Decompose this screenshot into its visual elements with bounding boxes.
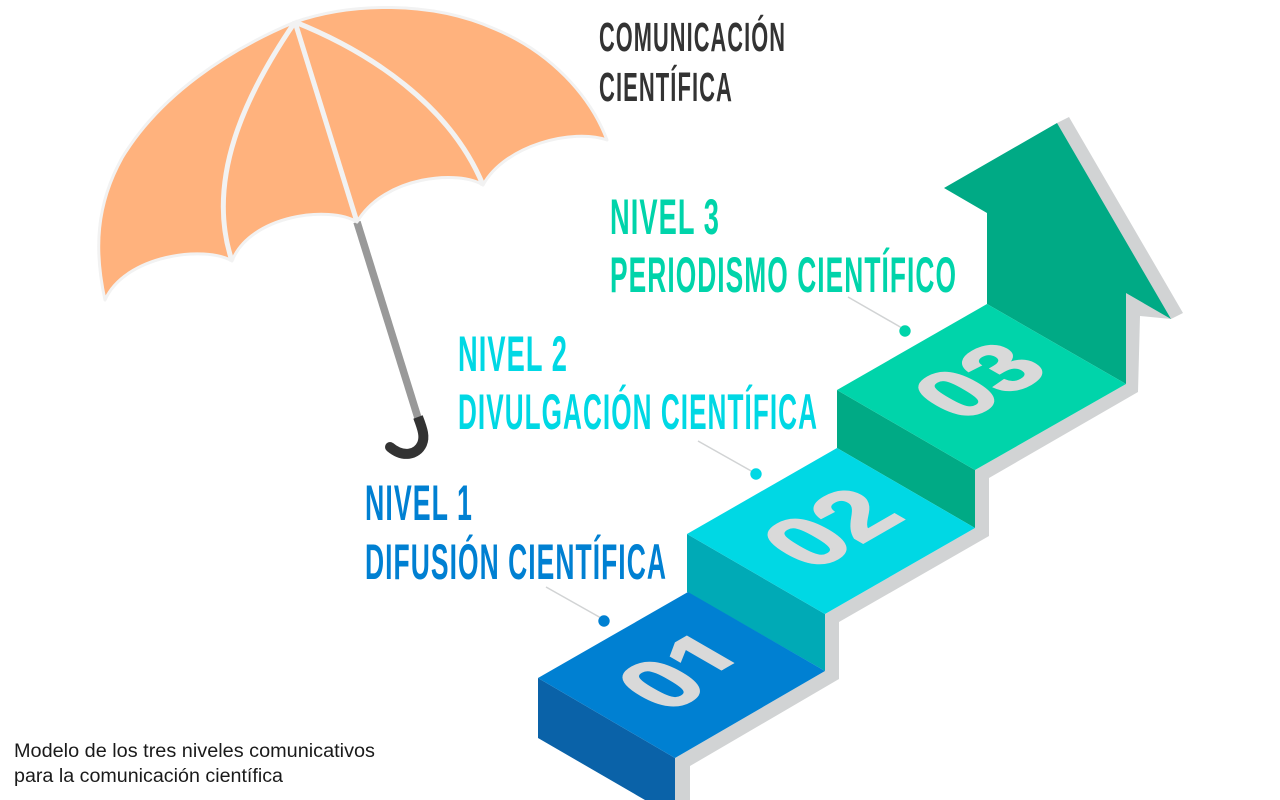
title: CIENTÍFICA: [599, 64, 733, 110]
step 01 tread: [538, 592, 825, 758]
staircase shadow: [675, 117, 1183, 800]
title: COMUNICACIÓN: [599, 14, 786, 60]
umbrella canopy: [99, 7, 607, 300]
label: nivel 1: NIVEL 1: [365, 475, 473, 531]
icon: umbrella: [99, 7, 607, 454]
connector: nivel 3: [848, 297, 911, 337]
step 01 number: 01: [593, 618, 778, 725]
label: nivel 1: DIFUSIÓN CIENTÍFICA: [365, 534, 667, 590]
title: [599, 14, 786, 110]
label: nivel 2: [458, 326, 818, 440]
arrow: [944, 123, 1171, 384]
label: nivel 2: DIVULGACIÓN CIENTÍFICA: [458, 384, 818, 440]
caption: [14, 741, 375, 787]
step 02 riser: [687, 534, 825, 671]
umbrella shaft: [357, 222, 418, 418]
umbrella handle: [390, 417, 423, 454]
step 03 riser: [837, 390, 975, 528]
connector: nivel 2: [698, 441, 762, 480]
step 03 tread: [837, 304, 1126, 470]
step 03: [837, 304, 1126, 528]
step 03 number: 03: [888, 328, 1070, 433]
step 02 number: 02: [736, 473, 926, 583]
step 01 riser: [538, 678, 675, 800]
step 01: [538, 592, 825, 800]
label: nivel 2: NIVEL 2: [458, 326, 568, 382]
caption: Modelo de los tres niveles comunicativos: [14, 741, 375, 762]
label: nivel 3: PERIODISMO CIENTÍFICO: [610, 247, 957, 303]
umbrella handle tip: [385, 442, 395, 452]
umbrella ribs: [223, 22, 483, 261]
caption: para la comunicación científica: [14, 766, 283, 787]
step 02: [687, 448, 975, 671]
label: nivel 3: [610, 189, 957, 303]
label: nivel 1: [365, 475, 667, 590]
label: nivel 3: NIVEL 3: [610, 189, 720, 245]
step 02 tread: [687, 448, 975, 614]
connector: nivel 1: [546, 587, 610, 627]
